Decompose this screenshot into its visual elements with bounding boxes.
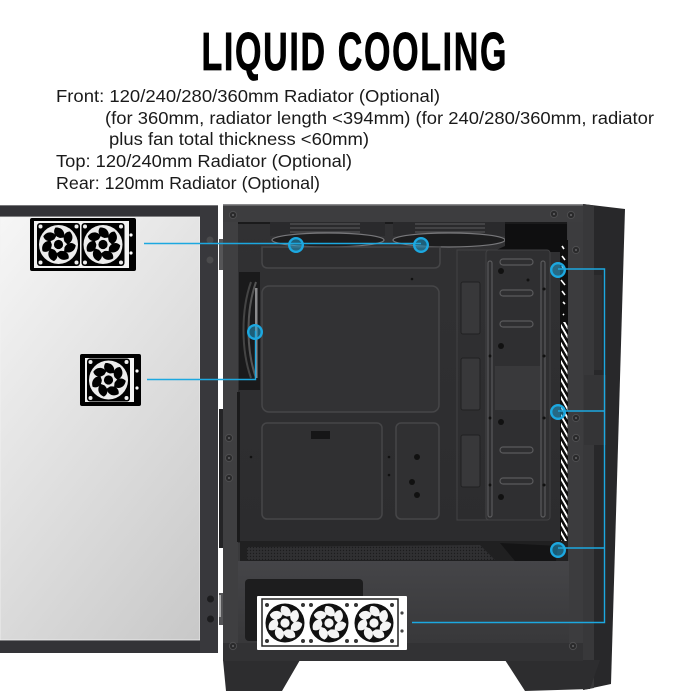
PSU opening: [245, 579, 363, 641]
tray details: [250, 278, 420, 498]
drive bay panel: [457, 250, 550, 520]
right interior edge: [568, 222, 583, 643]
PC case: [223, 204, 625, 691]
case screws: [225, 210, 580, 650]
callout: rear radiator icon: [80, 354, 141, 406]
blue leader lines: [144, 244, 604, 622]
case body: [223, 204, 583, 661]
base band: [223, 643, 583, 656]
open glass side door: [0, 205, 218, 653]
specifications text block: [56, 86, 654, 193]
PSU shroud: [238, 561, 569, 643]
specifications text block: Front: 120/240/280/360mm Radiator (Optional): [56, 86, 440, 106]
cable cutouts: [461, 282, 480, 487]
dark strip between door and case: [219, 409, 224, 548]
callout: top radiator icon: [30, 218, 136, 271]
blue location markers: [248, 238, 565, 557]
title: LIQUID COOLING: [202, 21, 506, 82]
callout: front radiator icon: [257, 596, 407, 650]
specifications text block: Top: 120/240mm Radiator (Optional): [56, 151, 352, 171]
front panel: [583, 204, 625, 690]
rear fan: [239, 272, 260, 390]
door hinges: [219, 239, 236, 625]
case feet: [223, 660, 300, 691]
lower vent: [240, 541, 568, 562]
specifications text block: plus fan total thickness <60mm): [109, 129, 369, 149]
interior tray: [238, 222, 567, 543]
specifications text block: Rear: 120mm Radiator (Optional): [56, 173, 320, 193]
top frame: [223, 204, 583, 222]
specifications text block: (for 360mm, radiator length <394mm) (for 240/280/360mm, radiator: [105, 108, 654, 128]
left interior edge: [223, 222, 238, 643]
top fans: [238, 222, 567, 252]
front radiator opening stripes: [560, 240, 568, 561]
motherboard tray panels: [262, 247, 440, 519]
